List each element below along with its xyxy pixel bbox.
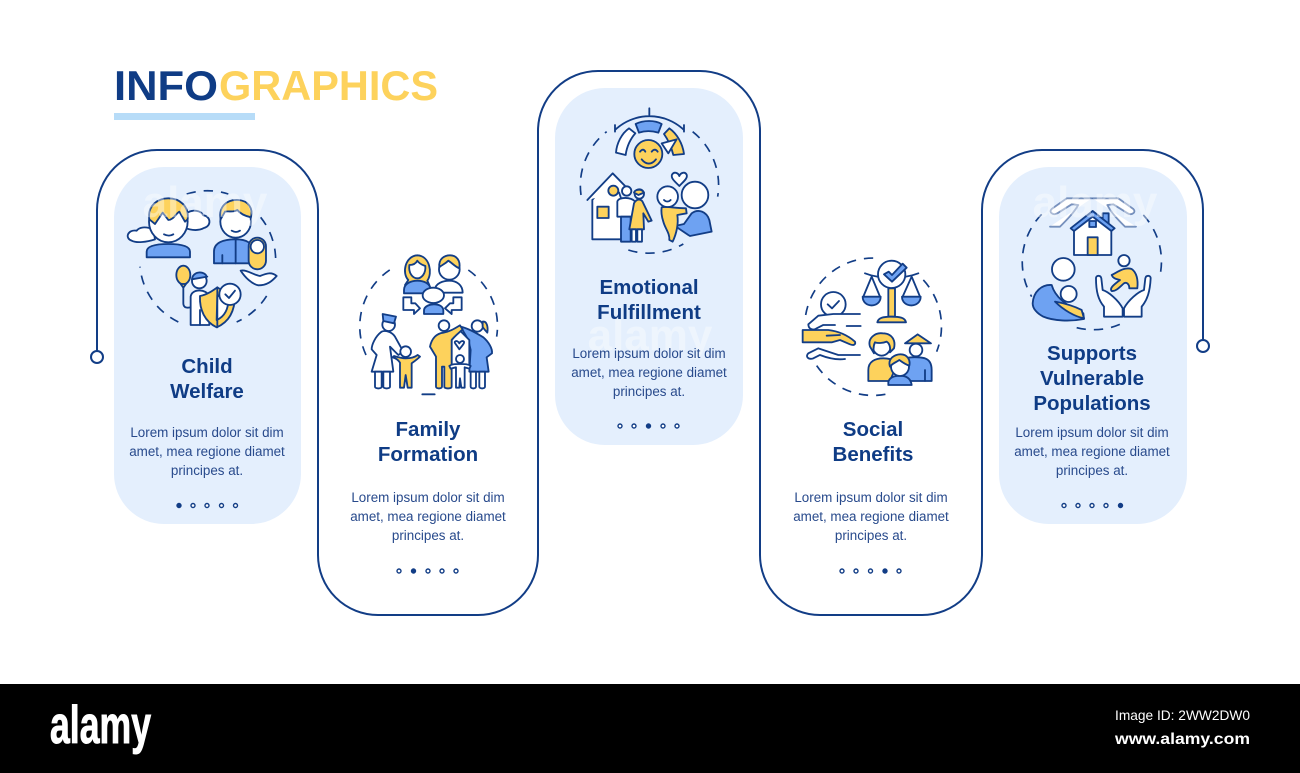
text block: family formation: principes at. [392,528,464,543]
text block: family formation [350,490,506,543]
icon: family formation [360,255,497,394]
heading: emotional fulfillment [597,276,701,324]
text block: social benefits: Lorem ipsum dolor sit dim [794,490,948,505]
text block: family formation: amet, mea regione diamet [350,509,506,524]
text block: child welfare: principes at. [171,463,243,478]
heading: child welfare: Child [181,355,233,378]
watermark: child welfare: alamy [143,178,268,227]
icon: supports vulnerable populations [1022,198,1161,330]
heading: supports vulnerable populations [1033,342,1151,415]
title: INFO [114,62,218,109]
panel background: child welfare [114,167,301,524]
heading: family formation: Family [396,418,461,441]
heading: supports vulnerable populations: Vulnerable [1040,367,1144,390]
heading: emotional fulfillment: Emotional [599,276,699,299]
outline start dot [91,351,103,363]
text block: child welfare: Lorem ipsum dolor sit dim [130,425,284,440]
text block: child welfare: amet, mea regione diamet [129,444,285,459]
footer image id: Image ID: 2WW2DW0 [1115,707,1250,723]
text block: emotional fulfillment [571,346,727,399]
title [114,62,438,109]
pagination dots: step 5 [1062,504,1122,508]
heading: social benefits: Benefits [833,443,913,466]
heading: emotional fulfillment: Fulfillment [597,301,701,324]
text block: supports vulnerable populations: Lorem ipsum dolor sit dim [1015,425,1169,440]
outline end dot [1197,340,1209,352]
pagination dots: step 1 [177,504,238,508]
icon: emotional fulfillment [580,108,719,253]
panel background: supports vulnerable populations [999,167,1187,524]
footer logo: alamy [50,696,151,755]
pagination dots: step 2 [397,569,458,573]
heading: child welfare: Welfare [170,380,244,403]
heading: supports vulnerable populations: Supports [1047,342,1137,365]
text block: child welfare [129,425,285,478]
text block: family formation: Lorem ipsum dolor sit dim [351,490,505,505]
text block: social benefits: amet, mea regione diamet [793,509,949,524]
text block: supports vulnerable populations: principes at. [1056,463,1128,478]
heading: social benefits: Social [843,418,903,441]
pagination dots: step 4 [840,569,901,573]
icon: social benefits [803,258,941,395]
text block: emotional fulfillment: principes at. [613,384,685,399]
panel background: emotional fulfillment [555,88,743,445]
text block: supports vulnerable populations: amet, mea regione diamet [1014,444,1170,459]
watermark: supports vulnerable populations: alamy [1033,178,1158,227]
footer url: www.alamy.com [1114,731,1250,748]
footer bar [0,684,1300,773]
heading: family formation [378,418,478,466]
heading: family formation: Formation [378,443,478,466]
pagination dots: step 3 [618,424,679,428]
heading: supports vulnerable populations: Populations [1033,392,1151,415]
text block: social benefits: principes at. [835,528,907,543]
watermark: emotional fulfillment: alamy [588,311,713,360]
heading: social benefits [833,418,913,466]
text block: emotional fulfillment: amet, mea regione diamet [571,365,727,380]
connecting outline [97,71,1203,615]
title: GRAPHICS [219,62,438,109]
text block: supports vulnerable populations [1014,425,1170,478]
text block: emotional fulfillment: Lorem ipsum dolor sit dim [572,346,726,361]
icon: child welfare [128,191,277,327]
title underline [114,113,255,120]
text block: social benefits [793,490,949,543]
heading: child welfare [170,355,244,403]
